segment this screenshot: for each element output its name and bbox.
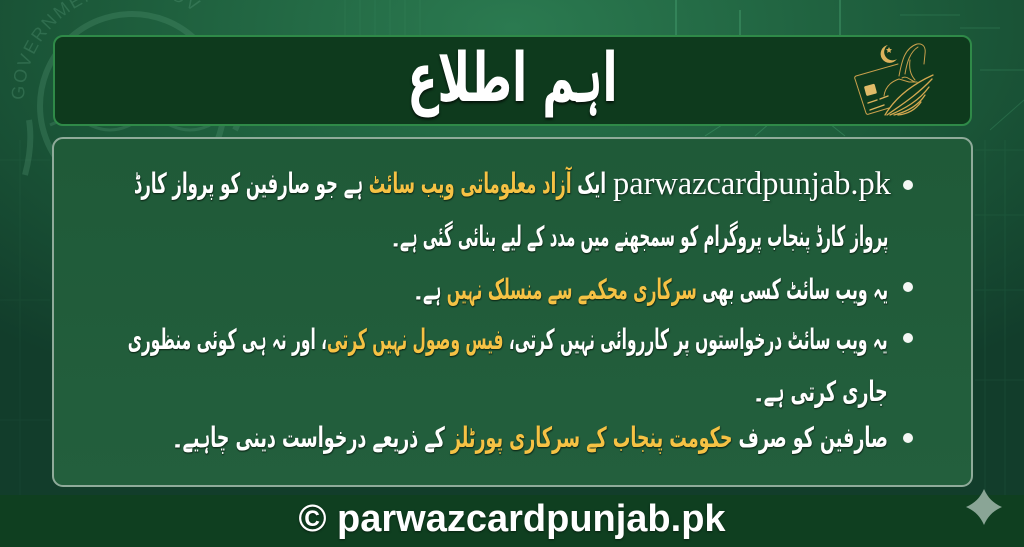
latin site name: parwazcardpunjab.pk: [613, 166, 891, 202]
footer band: [0, 495, 1024, 547]
card outline: [855, 64, 898, 114]
bullet 1: [903, 180, 913, 190]
bullet 2: [903, 282, 913, 292]
bullet 4: [903, 433, 913, 443]
icon: sparkle star: [966, 489, 1002, 525]
text line 2: پرواز کارڈ پنجاب پروگرام کو سمجھنے میں مدد کے لیے بنائی گئی ہے۔: [391, 220, 888, 253]
crescent and star: [881, 45, 897, 63]
text line 1: ایک آزاد معلوماتی ویب سائٹ ہے جو صارفین کو پرواز کارڈ: [134, 167, 606, 200]
veil: [884, 44, 925, 96]
icon: gold logo with card, crescent, veiled woman and wing: [854, 43, 934, 116]
text line 4: یہ ویب سائٹ درخواستوں پر کارروائی نہیں کرتی، فیس وصول نہیں کرتی، اور نہ ہی کوئی منظوری: [128, 323, 888, 356]
wing feathers: [885, 75, 933, 115]
title: اہم اطلاع: [407, 39, 618, 118]
bullet 3: [903, 333, 913, 343]
panel: notice body: [52, 137, 973, 487]
text line 6: صارفین کو صرف حکومت پنجاب کے سرکاری پورٹلز کے ذریعے درخواست دینی چاہیے۔: [172, 421, 888, 454]
text line 3: یہ ویب سائٹ کسی بھی سرکاری محکمے سے منسلک نہیں ہے۔: [414, 273, 888, 306]
text line 5: جاری کرتی ہے۔: [754, 375, 888, 408]
chip and card lines: [864, 84, 877, 96]
header panel: [53, 35, 972, 126]
footer website text: © parwazcardpunjab.pk: [298, 498, 726, 540]
